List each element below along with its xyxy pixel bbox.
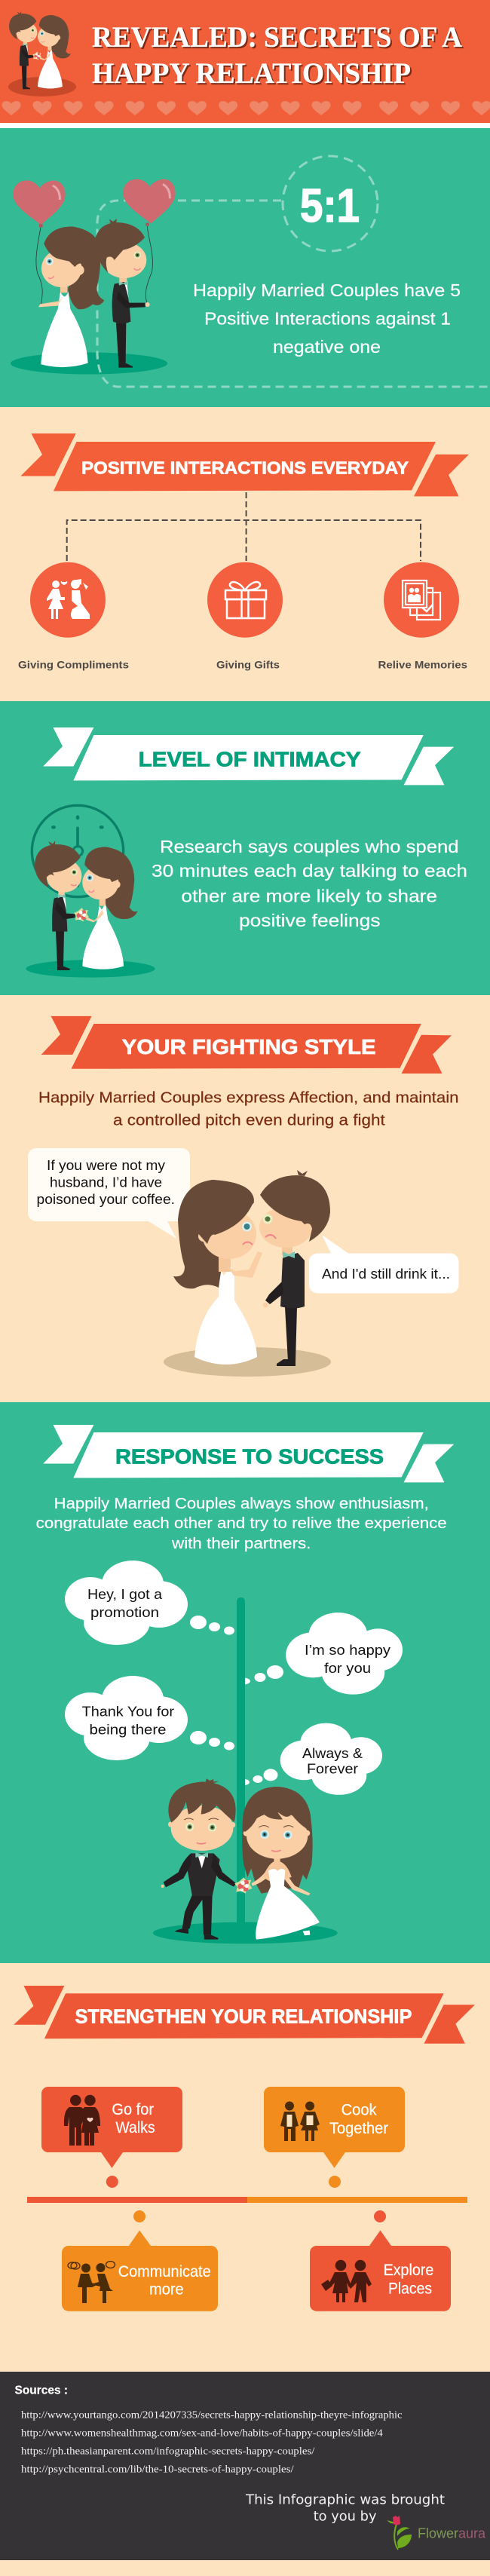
pole (237, 1597, 245, 1924)
banner (43, 1425, 454, 1482)
text: research: Research says couples who spend (160, 837, 458, 856)
thought bubble: promotion (65, 1561, 234, 1645)
text: response: with their partners. (171, 1536, 311, 1552)
speech bubble: wife: husband, I’d have (50, 1175, 162, 1190)
logo: floweraura: Floweraura (418, 2526, 486, 2541)
panel: header (0, 0, 490, 128)
thought bubble: so happy: I’m so happy (305, 1643, 390, 1658)
card: cook together (264, 2087, 405, 2168)
source links: http://www.yourtango.com/2014207335/secrets-happy-relationship-theyre-infographic (21, 2409, 403, 2421)
text: research (152, 837, 467, 930)
ratio circle (283, 156, 378, 251)
text: fighting style: a controlled pitch even during a fight (113, 1111, 385, 1129)
thought bubble: always and forever: Forever (307, 1761, 358, 1776)
heart row (2, 101, 490, 115)
banner (14, 1986, 475, 2044)
ground shadow (11, 353, 167, 374)
card: explore places: Explore (384, 2262, 433, 2279)
source links: http://psychcentral.com/lib/the-10-secrets-of-happy-couples/ (21, 2464, 294, 2476)
illustration: arguing couple (164, 1170, 331, 1377)
panel: strengthen your relationship (0, 1963, 490, 2372)
banner (43, 727, 454, 785)
text: response: Happily Married Couples always show enthusiasm, (54, 1496, 429, 1512)
dashed connector (97, 201, 490, 387)
panel: 5 to 1 ratio (0, 128, 490, 407)
thought bubble: thank you (65, 1676, 234, 1760)
heading: sources: Sources : (15, 2385, 68, 2397)
title (92, 21, 462, 90)
dashed tree connector (67, 492, 421, 561)
source links: https://ph.theasianparent.com/infographic-secrets-happy-couples/ (21, 2446, 315, 2458)
speech bubble: husband: And I'd still drink it... (322, 1266, 450, 1282)
banner (41, 1016, 452, 1074)
credit text: to you by (314, 2508, 377, 2524)
title: HAPPY RELATIONSHIP (92, 57, 411, 90)
panel: your fighting style (0, 995, 490, 1402)
thought bubble: always and forever (245, 1723, 382, 1795)
card: go for walks: Walks (115, 2119, 155, 2136)
banner: LEVEL OF INTIMACY (139, 748, 361, 770)
labels: Giving Gifts (216, 659, 280, 671)
speech bubble: husband (309, 1235, 458, 1294)
text: response: congratulate each other and try to relive the experience (36, 1515, 447, 1532)
banner: POSITIVE INTERACTIONS EVERYDAY (81, 458, 409, 478)
card: communicate more: Communicate (118, 2263, 211, 2280)
labels: Giving Compliments (18, 659, 129, 671)
panel: positive interactions everyday (0, 407, 490, 701)
illustration: clock and couple (26, 805, 155, 978)
speech bubble: wife (28, 1148, 190, 1239)
text: research: positive feelings (239, 911, 380, 930)
thought bubble: so happy (245, 1613, 403, 1695)
card: cook together: Cook (341, 2102, 377, 2119)
speech bubble: wife: poisoned your coffee. (36, 1191, 175, 1207)
card: explore places: Places (388, 2280, 432, 2297)
credit text: This Infographic was brought (245, 2492, 445, 2508)
panel: response to success (0, 1402, 490, 1963)
labels (18, 659, 467, 671)
icon: giving gifts (207, 562, 283, 638)
illustration: couple with balloons (13, 179, 176, 368)
card: communicate more: more (149, 2281, 184, 2298)
icon: giving compliments (30, 562, 106, 638)
labels: Relive Memories (378, 659, 467, 671)
source links: http://www.womenshealthmag.com/sex-and-love/habits-of-happy-couples/slide/4 (21, 2428, 383, 2440)
text: fighting style (38, 1089, 458, 1129)
text: research: other are more likely to share (181, 887, 437, 906)
thought bubble: thank you: being there (89, 1723, 166, 1738)
card: go for walks (41, 2087, 182, 2168)
thought bubble: promotion: Hey, I got a (87, 1587, 163, 1602)
credit text (245, 2492, 445, 2524)
title: REVEALED: SECRETS OF A (92, 21, 462, 54)
card: go for walks: Go for (112, 2101, 154, 2118)
thought bubble: thank you: Thank You for (82, 1704, 174, 1719)
logo: floweraura (387, 2516, 486, 2550)
text: ratio explanation (193, 280, 461, 357)
text: response (36, 1496, 447, 1552)
banner: YOUR FIGHTING STYLE (122, 1035, 376, 1058)
banner: STRENGTHEN YOUR RELATIONSHIP (75, 2007, 412, 2028)
text: ratio explanation: negative one (273, 337, 381, 357)
icon: bride and groom (8, 11, 76, 96)
text: ratio explanation: Happily Married Couples have 5 (193, 280, 461, 300)
ratio circle: 5:1 (300, 180, 360, 232)
speech bubble: wife: If you were not my (47, 1157, 166, 1173)
card: communicate more (62, 2230, 218, 2311)
panel: sources footer (0, 2372, 490, 2560)
text: ratio explanation: Positive Interactions against 1 (204, 309, 451, 329)
thought bubble: so happy: for you (324, 1661, 371, 1676)
panel: level of intimacy (0, 701, 490, 995)
card: cook together: Together (329, 2120, 388, 2137)
banner (20, 433, 469, 496)
timeline (27, 2176, 467, 2222)
thought bubble: always and forever: Always & (302, 1746, 363, 1761)
illustration: couple holding hands (153, 1778, 338, 1943)
source links (21, 2409, 403, 2476)
thought bubble: promotion: promotion (90, 1605, 159, 1620)
icon: relive memories (384, 562, 459, 638)
card: explore places (310, 2230, 451, 2311)
text: research: 30 minutes each day talking to each (152, 861, 467, 881)
banner: RESPONSE TO SUCCESS (115, 1444, 384, 1469)
text: fighting style: Happily Married Couples express Affection, and maintain (38, 1089, 458, 1107)
